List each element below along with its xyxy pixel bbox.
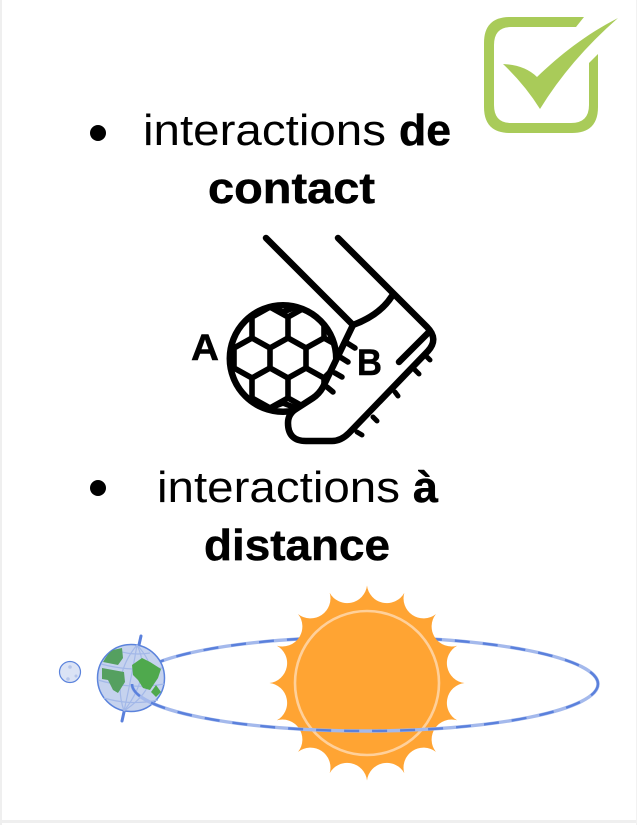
label A: A [191,327,219,368]
heading: interactions de contact: interactions [143,106,386,155]
heading: interactions de contact [143,106,451,213]
heading: interactions à distance: à [413,463,439,512]
label B: B [357,342,382,383]
heading: interactions à distance: interactions [157,463,400,512]
moon [60,662,80,682]
earth [98,636,164,721]
sun [270,586,464,780]
bullet point: contact [90,125,106,141]
soccer ball [226,302,338,415]
heading: interactions à distance [157,463,439,570]
diagram: Earth and Moon orbiting the Sun [60,586,598,780]
heading: interactions de contact: de [399,106,451,155]
heading: interactions à distance: distance [204,521,390,570]
bullet point: distance [90,480,106,496]
icon: boot kicking a soccer ball [191,238,433,441]
orbit back half [132,637,598,684]
heading: interactions de contact: contact [208,164,375,213]
icon: green checkbox with tick [484,17,618,133]
football boot [266,238,433,441]
orbit front half [132,684,598,731]
